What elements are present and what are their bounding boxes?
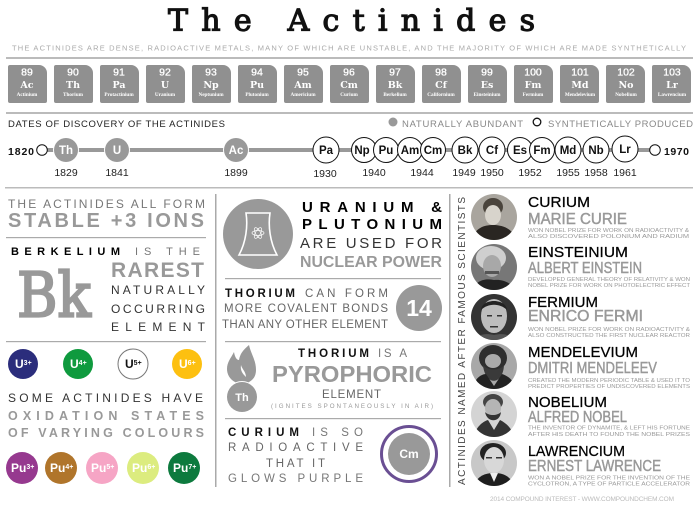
portrait: Marie Curie: [471, 194, 517, 241]
panel: uranium oxidation states: U: [15, 357, 24, 371]
scientist: Lawrencium: CYCLOTRON, A TYPE OF PARTICLE ACCELERATOR: [528, 482, 690, 488]
legend: [388, 118, 693, 130]
portrait: Enrico Fermi: [471, 294, 517, 341]
periodic table cards: Actinium: [17, 92, 38, 98]
periodic table cards: 94: [251, 66, 263, 78]
panel: thorium bonds text: CAN FORM: [305, 288, 388, 300]
panel: thorium bonds text: MORE COVALENT BONDS: [224, 303, 388, 315]
panel: stable ions: [8, 197, 205, 232]
panel: uranium oxidation states: 3+: [24, 360, 32, 367]
periodic table cards: Lawrencium: [658, 92, 687, 98]
periodic table cards: Cf: [435, 80, 448, 91]
panel: plutonium oxidation states: 4+: [65, 464, 73, 471]
subtitle: THE ACTINIDES ARE DENSE, RADIOACTIVE METALS, MANY OF WHICH ARE UNSTABLE, AND THE MAJORITY OF WHICH ARE MADE SYNTHETICALLY: [12, 44, 686, 52]
periodic table cards: Protactinium: [104, 92, 134, 98]
scientist: Curium: ALSO DISCOVERED POLONIUM AND RADIUM: [528, 234, 690, 240]
icon: curium glow: Cm: [399, 447, 419, 461]
timeline heading: DATES OF DISCOVERY OF THE ACTINIDES: [8, 119, 225, 130]
periodic table cards: Mendelevium: [565, 92, 596, 98]
legend: NATURALLY ABUNDANT: [402, 119, 523, 130]
panel: berkelium: [11, 246, 206, 334]
panel: berkelium: NATURALLY: [111, 283, 205, 297]
panel: pyrophoric text: PYROPHORIC: [272, 361, 432, 387]
panel: plutonium oxidation states: 6+: [147, 464, 155, 471]
timeline: Ac: [229, 145, 244, 157]
icon: flame with thorium: [226, 345, 258, 413]
scientist: Fermium: ENRICO FERMI: [528, 308, 643, 325]
timeline: [8, 136, 689, 180]
periodic table cards: Americium: [290, 92, 316, 98]
periodic table cards: Lr: [666, 80, 679, 91]
periodic table cards: 91: [113, 66, 125, 78]
scientist: Lawrencium: [528, 443, 690, 488]
panel: curium glows text: CURIUM: [228, 427, 299, 439]
periodic table cards: Curium: [340, 92, 358, 98]
scientist: Mendelevium: CREATED THE MODERN PERIODIC TABLE & USED IT TO: [528, 378, 690, 384]
panel: plutonium oxidation states: Pu: [50, 461, 65, 475]
panel: uranium oxidation states: 5+: [134, 360, 142, 367]
timeline: 1961: [613, 167, 637, 179]
timeline: 1958: [584, 167, 608, 179]
portrait: Ernest Lawrence: [471, 440, 517, 487]
timeline: Es: [513, 145, 527, 157]
footer: 2014 COMPOUND INTEREST - WWW.COMPOUNDCHEM.COM: [490, 496, 674, 503]
panel: curium glows text: [228, 427, 363, 485]
timeline: U: [113, 145, 121, 157]
panel: uranium oxidation states: [8, 349, 202, 379]
scientist: Mendelevium: MENDELEVIUM: [528, 344, 638, 361]
portrait: Albert Einstein: [471, 244, 517, 291]
periodic table cards: 100: [524, 66, 542, 78]
panel: uranium oxidation states: U: [125, 357, 134, 371]
periodic table cards: Californium: [427, 92, 455, 98]
periodic table cards: 92: [159, 66, 171, 78]
scientist: Lawrencium: WON A NOBEL PRIZE FOR THE INVENTION OF THE: [528, 476, 690, 482]
scientist: Fermium: WON NOBEL PRIZE FOR WORK ON RADIOACTIVITY &: [528, 327, 690, 333]
periodic table cards: Thorium: [63, 92, 84, 98]
timeline: Th: [59, 145, 73, 157]
panel: berkelium: RAREST: [111, 259, 204, 282]
panel: uranium oxidation states: U: [70, 357, 79, 371]
periodic table cards: Neptunium: [198, 92, 224, 98]
scientist: Curium: [528, 194, 690, 240]
periodic table cards: Einsteinium: [474, 92, 501, 98]
timeline: 1820: [8, 146, 34, 158]
panel: plutonium oxidation states: 5+: [106, 464, 114, 471]
timeline: Pu: [379, 145, 393, 157]
scientist: Einsteinium: DEVELOPED GENERAL THEORY OF RELATIVITY & WON: [528, 277, 690, 283]
panel: pyrophoric text: THORIUM: [298, 348, 369, 360]
panel: plutonium oxidation states: 7+: [188, 464, 196, 471]
scientist: Mendelevium: [528, 344, 690, 390]
periodic table cards: Berkelium: [383, 92, 407, 98]
panel: curium glows text: RADIOACTIVE: [228, 442, 363, 454]
periodic table cards: U: [161, 80, 170, 91]
scientist: Fermium: FERMIUM: [528, 294, 598, 311]
title: The Actinides: [168, 4, 535, 38]
scientist: Nobelium: [528, 394, 690, 438]
panel: curium glows text: THAT IT: [266, 458, 325, 470]
timeline: Fm: [533, 145, 551, 157]
panel: uranium oxidation states: 6+: [188, 360, 196, 367]
timeline: 1952: [518, 167, 542, 179]
timeline: 1955: [556, 167, 580, 179]
panel: pyrophoric text: ELEMENT: [322, 389, 381, 401]
timeline: 1940: [362, 167, 386, 179]
panel: berkelium: ELEMENT: [111, 320, 206, 334]
panel: plutonium oxidation states: 3+: [26, 464, 34, 471]
timeline: Bk: [458, 145, 473, 157]
timeline: 1970: [664, 146, 689, 158]
icon: flame with thorium: Th: [235, 392, 249, 404]
scientist: Nobelium: AFTER HIS DEATH TO FOUND THE NOBEL PRIZES: [528, 432, 690, 438]
portrait: Alfred Nobel: [471, 391, 517, 438]
periodic table cards: 101: [571, 66, 589, 78]
portrait: Dmitri Mendeleev: [471, 343, 517, 390]
panel: stable ions: THE ACTINIDES ALL FORM: [8, 197, 205, 211]
periodic table cards: 95: [297, 66, 309, 78]
timeline: Pa: [319, 145, 334, 157]
periodic table cards: Nobelium: [615, 92, 637, 98]
panel: thorium bonds text: THAN ANY OTHER ELEMENT: [222, 319, 388, 331]
panel: curium glows text: GLOWS PURPLE: [228, 473, 363, 485]
timeline: 1950: [480, 167, 504, 179]
timeline: 1930: [313, 168, 337, 180]
periodic table cards: Am: [293, 80, 312, 91]
panel: berkelium: OCCURRING: [111, 302, 205, 316]
panel: nuclear power text: NUCLEAR POWER: [300, 254, 442, 271]
scientist: Mendelevium: DMITRI MENDELEEV: [528, 360, 658, 377]
timeline: 1949: [452, 167, 476, 179]
timeline: 1841: [105, 167, 129, 179]
legend: SYNTHETICALLY PRODUCED: [548, 119, 693, 130]
panel: curium glows text: IS SO: [312, 427, 363, 439]
icon: 14 badge: [396, 285, 442, 331]
periodic table cards: 102: [617, 66, 635, 78]
periodic table cards: Fm: [525, 80, 541, 91]
text: oxidation states: [8, 391, 204, 440]
scientist: Lawrencium: LAWRENCIUM: [528, 443, 625, 460]
periodic table cards: 89: [21, 66, 33, 78]
icon: cooling tower: [223, 199, 293, 269]
scientist: Nobelium: NOBELIUM: [528, 394, 607, 411]
periodic table cards: Bk: [388, 80, 403, 91]
periodic table cards: 98: [435, 66, 447, 78]
periodic table cards: 99: [481, 66, 493, 78]
panel: pyrophoric text: [271, 348, 433, 410]
panel: plutonium oxidation states: Pu: [11, 461, 26, 475]
scientist: Curium: CURIUM: [528, 194, 590, 211]
scientist: Nobelium: ALFRED NOBEL: [528, 409, 627, 426]
periodic table cards: Md: [571, 80, 589, 91]
panel: pyrophoric text: IS A: [378, 348, 407, 360]
timeline: 1829: [54, 167, 78, 179]
panel: plutonium oxidation states: Pu: [173, 461, 188, 475]
periodic table cards: 96: [343, 66, 355, 78]
periodic table cards: 97: [389, 66, 401, 78]
timeline: Md: [560, 145, 576, 157]
timeline: Nb: [588, 145, 604, 157]
scientist: Curium: WON NOBEL PRIZE FOR WORK ON RADIOACTIVITY &: [528, 228, 689, 234]
text: oxidation states: OXIDATION STATES: [8, 409, 204, 423]
text: oxidation states: OF VARYING COLOURS: [8, 426, 204, 440]
panel: berkelium: IS THE: [135, 246, 200, 258]
timeline: Cf: [486, 145, 498, 157]
panel: nuclear power text: PLUTONIUM: [302, 216, 442, 233]
periodic table cards: 93: [205, 66, 217, 78]
panel: thorium bonds text: THORIUM: [225, 288, 295, 300]
panel: berkelium: BERKELIUM: [11, 246, 120, 258]
periodic table cards: Th: [66, 80, 80, 91]
periodic table cards: [8, 65, 691, 103]
icon: curium glow: [382, 426, 436, 482]
scientist: Fermium: ALSO CONSTRUCTED THE FIRST NUCLEAR REACTOR: [528, 333, 690, 339]
periodic table cards: Np: [203, 80, 219, 91]
panel: plutonium oxidation states: Pu: [91, 461, 106, 475]
panel: nuclear power text: ARE USED FOR: [300, 235, 442, 252]
periodic table cards: Pu: [250, 80, 264, 91]
text: oxidation states: SOME ACTINIDES HAVE: [8, 391, 203, 405]
panel: stable ions: STABLE +3 IONS: [8, 210, 204, 232]
scientist: Einsteinium: EINSTEINIUM: [528, 244, 628, 261]
scientist: Einsteinium: NOBEL PRIZE FOR WORK ON PHOTOELECTRIC EFFECT: [528, 283, 691, 289]
scientist: Einsteinium: ALBERT EINSTEIN: [528, 260, 642, 277]
timeline: Lr: [619, 144, 631, 156]
periodic table cards: Plutonium: [245, 92, 269, 98]
periodic table cards: Uranium: [155, 92, 176, 98]
periodic table cards: Es: [481, 80, 493, 91]
scientist: Fermium: [528, 294, 690, 339]
timeline: Np: [354, 145, 370, 157]
panel: uranium oxidation states: U: [179, 357, 188, 371]
panel: plutonium oxidation states: Pu: [132, 461, 147, 475]
periodic table cards: 103: [663, 66, 681, 78]
scientist: Lawrencium: ERNEST LAWRENCE: [528, 458, 661, 475]
scientist: Mendelevium: PREDICT PROPERTIES OF UNDISCOVERED ELEMENTS: [528, 384, 690, 390]
panel: berkelium: Bk: [17, 258, 91, 332]
timeline: Cm: [424, 145, 442, 157]
scientist: Curium: MARIE CURIE: [528, 211, 627, 228]
panel: thorium bonds text: [222, 288, 388, 331]
periodic table cards: Ac: [19, 80, 34, 91]
vertical heading: scientists: ACTINIDES NAMED AFTER FAMOUS SCIENTISTS: [457, 197, 468, 485]
panel: uranium oxidation states: 4+: [79, 360, 87, 367]
periodic table cards: 90: [67, 66, 79, 78]
panel: pyrophoric text: (IGNITES SPONTANEOUSLY IN AIR): [271, 403, 433, 410]
periodic table cards: Cm: [340, 80, 358, 91]
scientist: Einsteinium: [528, 244, 691, 289]
panel: plutonium oxidation states: [6, 452, 200, 484]
panel: nuclear power text: URANIUM &: [302, 199, 442, 216]
timeline: 1899: [224, 167, 248, 179]
icon: 14 badge: 14: [406, 295, 432, 321]
scientist: Nobelium: THE INVENTOR OF DYNAMITE, & LEFT HIS FORTUNE: [528, 426, 690, 432]
timeline: 1944: [410, 167, 434, 179]
periodic table cards: Fermium: [523, 92, 544, 98]
periodic table cards: No: [618, 80, 634, 91]
timeline: Am: [401, 145, 419, 157]
panel: nuclear power text: [300, 199, 442, 271]
periodic table cards: Pa: [112, 80, 126, 91]
